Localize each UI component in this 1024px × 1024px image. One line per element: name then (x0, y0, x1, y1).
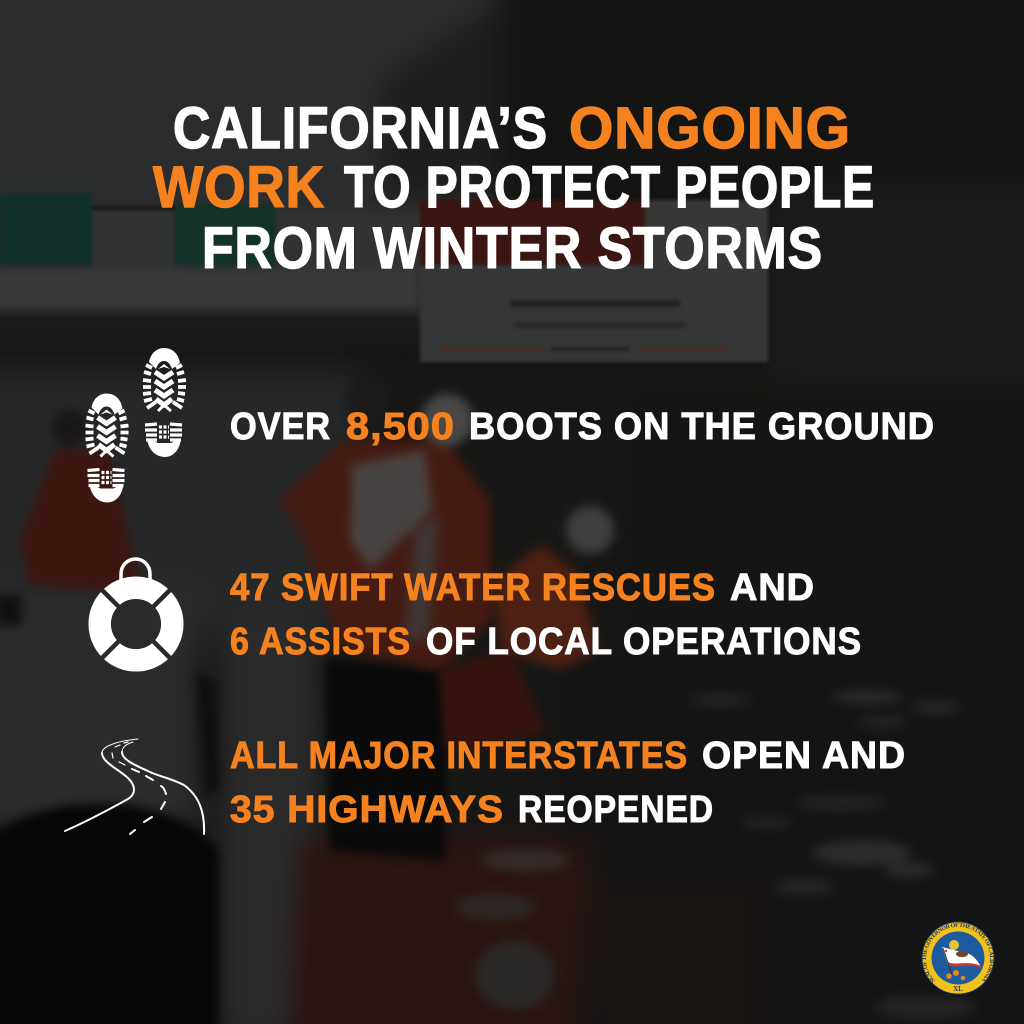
text: interstates and highways: REOPENED (518, 789, 714, 831)
icon: boot prints (86, 348, 186, 502)
text: interstates and highways: ALL MAJOR INTERSTATES (230, 735, 688, 777)
text: boots on the ground: 8,500 (346, 406, 455, 448)
title: TO PROTECT PEOPLE (344, 155, 875, 220)
text: boots on the ground (230, 406, 935, 448)
icon: winding road (65, 739, 204, 834)
text: swift water rescues: 47 SWIFT WATER RESCUES (230, 567, 716, 609)
text: swift water rescues: 6 ASSISTS (230, 621, 411, 663)
title: CALIFORNIA’S (173, 96, 548, 161)
icon: life ring (100, 559, 172, 660)
text: boots on the ground: OVER (230, 406, 331, 448)
icon: state seal: XL (953, 985, 963, 993)
title: WORK (153, 155, 325, 220)
text: boots on the ground: BOOTS ON THE GROUND (469, 406, 935, 448)
icon: state seal: SEAL OF THE GOVERNOR OF THE STATE OF CALIFORNIA (922, 922, 994, 983)
text: swift water rescues: AND (730, 567, 815, 609)
title (153, 96, 875, 281)
text: interstates and highways: OPEN AND (702, 735, 906, 777)
text: swift water rescues (230, 567, 862, 663)
text: swift water rescues: OF LOCAL OPERATIONS (426, 621, 862, 663)
title: FROM WINTER STORMS (202, 216, 823, 281)
text: interstates and highways (230, 735, 906, 831)
title: ONGOING (569, 96, 851, 161)
text: interstates and highways: 35 HIGHWAYS (230, 789, 504, 831)
